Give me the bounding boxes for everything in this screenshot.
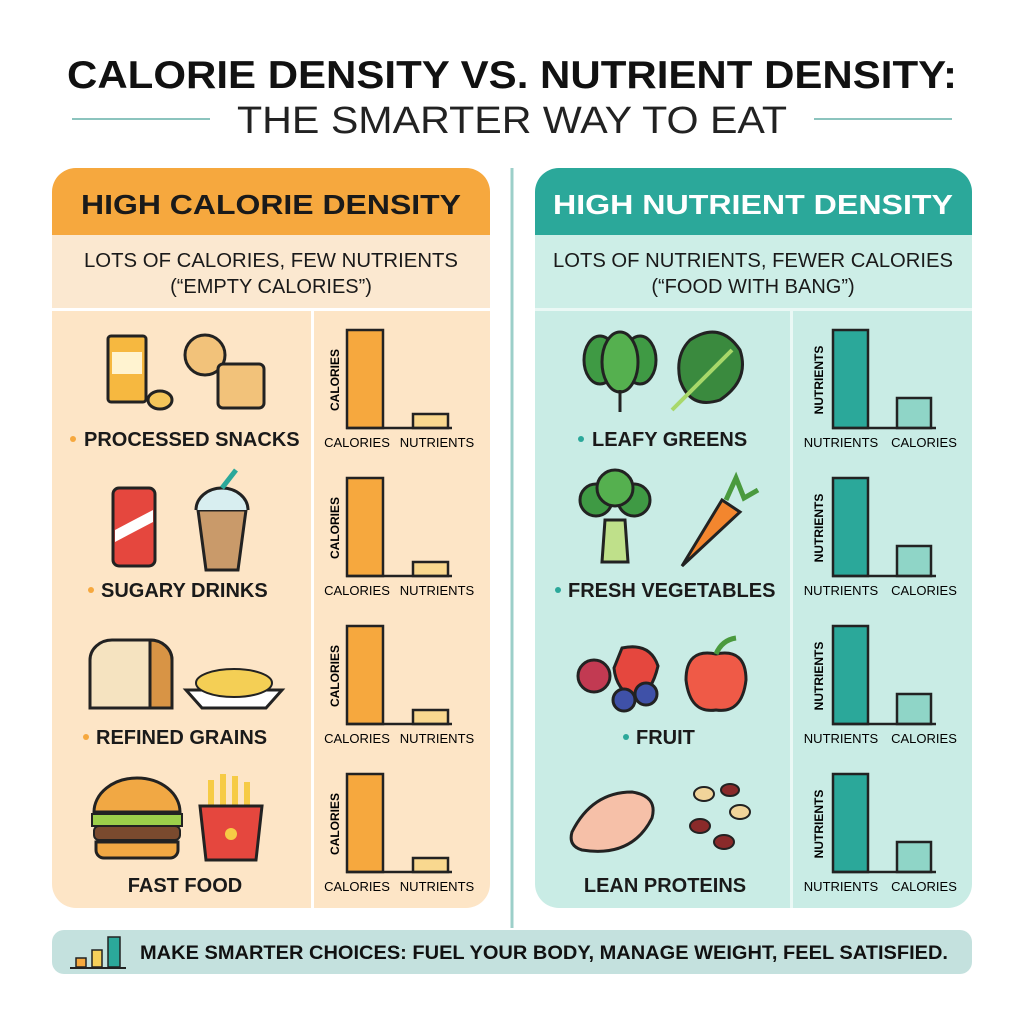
icon: berries and apple [578, 638, 746, 711]
charts: calories vs nutrients: NUTRIENTS [400, 583, 475, 598]
panel: high calorie density [52, 168, 490, 908]
icon: broccoli and carrot [580, 470, 758, 566]
charts: nutrients vs calories: NUTRIENTS [812, 790, 826, 858]
subheading: LOTS OF NUTRIENTS, FEWER CALORIES [553, 250, 953, 272]
charts: nutrients vs calories: NUTRIENTS [812, 346, 826, 414]
charts: nutrients vs calories [804, 330, 957, 894]
icon: burger and fries [92, 774, 262, 860]
footer banner: MAKE SMARTER CHOICES: FUEL YOUR BODY, MANAGE WEIGHT, FEEL SATISFIED. [140, 943, 948, 964]
heading: high calorie density: HIGH CALORIE DENSITY [81, 189, 461, 220]
title [67, 54, 957, 142]
charts: calories vs nutrients: CALORIES [324, 731, 390, 746]
panel: high nutrient density [535, 168, 972, 908]
charts: calories vs nutrients: CALORIES [324, 879, 390, 894]
charts: nutrients vs calories: NUTRIENTS [804, 879, 879, 894]
icon: chicken and beans [571, 784, 750, 851]
label: fresh vegetables: FRESH VEGETABLES [568, 580, 775, 602]
label: fast food: FAST FOOD [128, 875, 242, 897]
footer banner [52, 930, 972, 974]
heading: high nutrient density: HIGH NUTRIENT DENSITY [553, 189, 953, 220]
subheading: (“EMPTY CALORIES”) [170, 276, 372, 298]
icon: soda and bubble tea [113, 470, 248, 570]
charts: nutrients vs calories: CALORIES [891, 879, 957, 894]
label: refined grains: REFINED GRAINS [96, 727, 267, 749]
charts: nutrients vs calories: CALORIES [891, 435, 957, 450]
title: CALORIE DENSITY VS. NUTRIENT DENSITY: [67, 54, 957, 97]
charts: calories vs nutrients: CALORIES [324, 435, 390, 450]
subheading: (“FOOD WITH BANG”) [651, 276, 855, 298]
label: processed snacks: PROCESSED SNACKS [84, 429, 300, 451]
charts: calories vs nutrients: NUTRIENTS [400, 731, 475, 746]
charts: calories vs nutrients: CALORIES [324, 583, 390, 598]
icon: bar chart [70, 937, 126, 968]
heading: high calorie density [52, 168, 490, 235]
label: sugary drinks: SUGARY DRINKS [101, 580, 268, 602]
charts: calories vs nutrients: CALORIES [328, 349, 342, 411]
charts: calories vs nutrients: CALORIES [328, 645, 342, 707]
charts: nutrients vs calories: NUTRIENTS [804, 435, 879, 450]
charts: calories vs nutrients: CALORIES [328, 793, 342, 855]
icon: leafy greens [584, 332, 742, 412]
charts: nutrients vs calories: CALORIES [891, 731, 957, 746]
icon: bread and pasta [90, 640, 282, 708]
title: THE SMARTER WAY TO EAT [237, 100, 787, 142]
subheading: LOTS OF CALORIES, FEW NUTRIENTS [84, 250, 458, 272]
label: fruit: FRUIT [636, 727, 695, 749]
label: leafy greens: LEAFY GREENS [592, 429, 747, 451]
charts: calories vs nutrients: NUTRIENTS [400, 879, 475, 894]
charts: calories vs nutrients [324, 330, 475, 894]
charts: nutrients vs calories: NUTRIENTS [804, 583, 879, 598]
icon: chips and crackers [108, 335, 264, 409]
charts: calories vs nutrients: NUTRIENTS [400, 435, 475, 450]
heading: high nutrient density [535, 168, 972, 235]
charts: nutrients vs calories: CALORIES [891, 583, 957, 598]
subheading [535, 235, 972, 308]
charts: calories vs nutrients: CALORIES [328, 497, 342, 559]
charts: nutrients vs calories: NUTRIENTS [804, 731, 879, 746]
charts: nutrients vs calories: NUTRIENTS [812, 642, 826, 710]
label: lean proteins: LEAN PROTEINS [584, 875, 746, 897]
charts: nutrients vs calories: NUTRIENTS [812, 494, 826, 562]
subheading [52, 235, 490, 308]
